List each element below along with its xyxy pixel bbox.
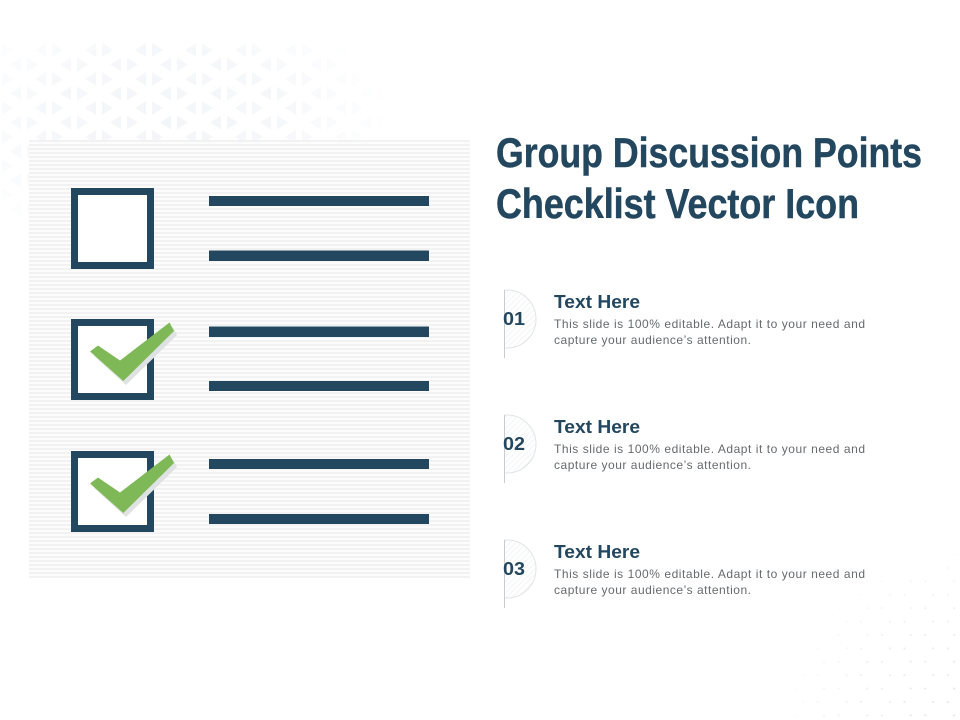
checkbox 1: empty xyxy=(74,192,150,266)
checklist lines row 1 xyxy=(209,196,429,261)
number badge 02: 02 xyxy=(503,434,525,454)
item body text: This slide is 100% editable. Adapt it to your need and xyxy=(554,567,865,581)
item body text: capture your audience’s attention. xyxy=(554,458,751,472)
checkbox 3: checked xyxy=(74,454,177,528)
striped panel background xyxy=(29,140,470,578)
item 01 xyxy=(478,290,865,358)
background: dot pattern xyxy=(817,568,956,716)
number badge 02 xyxy=(504,414,536,483)
number badge 03: 03 xyxy=(503,559,525,579)
item body text: capture your audience’s attention. xyxy=(554,333,751,347)
checklist lines row 2 xyxy=(209,326,429,391)
item body text: This slide is 100% editable. Adapt it to your need and xyxy=(554,442,865,456)
checkbox 2: checked xyxy=(74,322,177,396)
title xyxy=(496,129,922,227)
background: triangle pattern xyxy=(27,44,304,140)
item 03 xyxy=(478,540,865,608)
panel: checklist illustration xyxy=(29,140,470,578)
checklist lines row 3 xyxy=(209,459,429,524)
item body text xyxy=(554,567,865,597)
item body text xyxy=(554,442,865,472)
number badge 03 xyxy=(504,540,536,608)
item body text: This slide is 100% editable. Adapt it to your need and xyxy=(554,317,865,331)
item 02 xyxy=(478,415,865,483)
title: Checklist Vector Icon xyxy=(496,180,859,227)
item heading: Text Here xyxy=(554,417,640,437)
number badge 01: 01 xyxy=(503,309,525,329)
item body text xyxy=(554,317,865,347)
item body text: capture your audience’s attention. xyxy=(554,583,751,597)
item heading: Text Here xyxy=(554,542,640,562)
number badge 01 xyxy=(504,290,536,358)
item heading: Text Here xyxy=(554,292,640,312)
